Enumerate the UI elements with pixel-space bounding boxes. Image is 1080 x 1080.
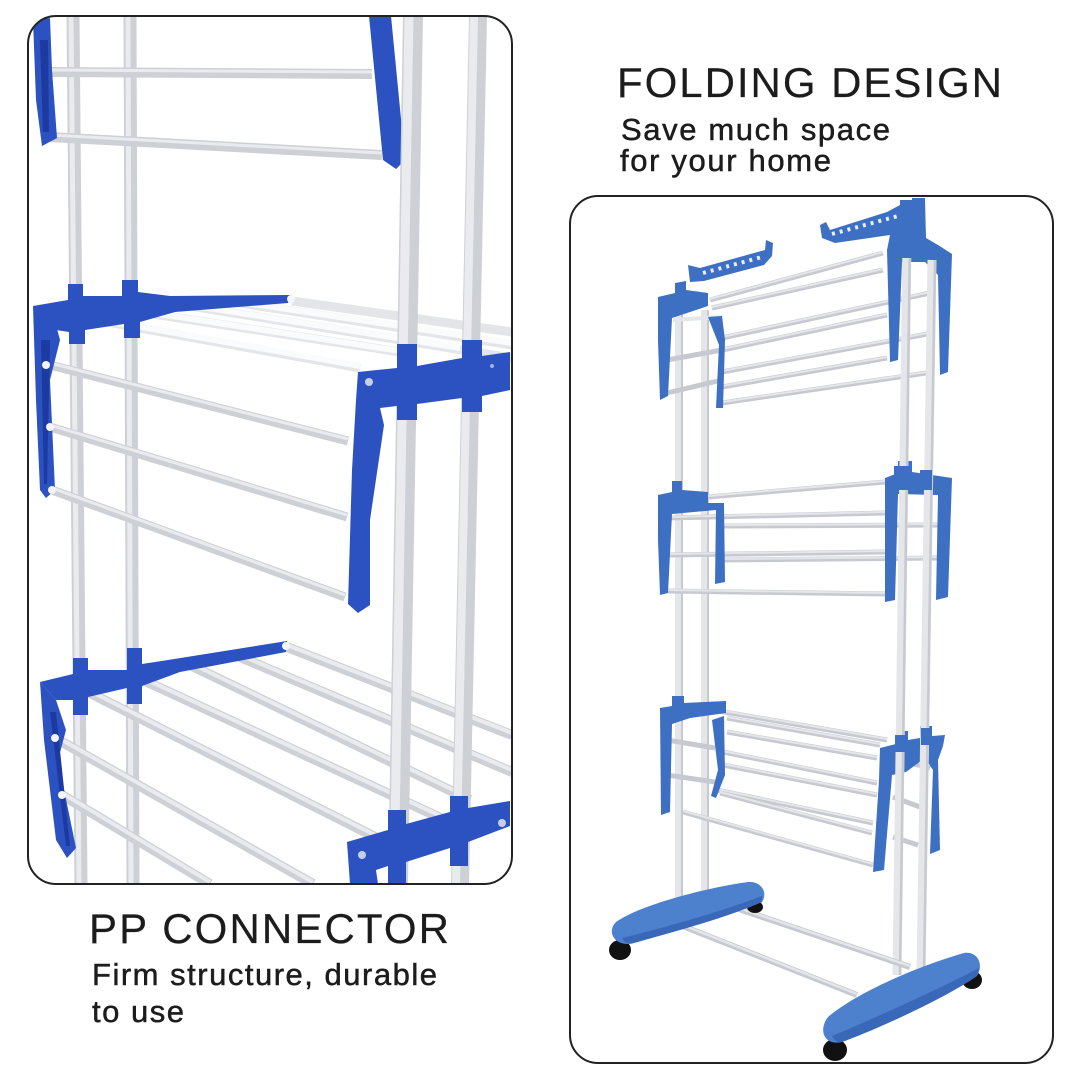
bottom shelf rails [667,709,930,865]
top shelf rails [667,252,933,403]
middle shelf blue brackets [658,461,952,602]
bottom tier front connector [347,796,510,884]
middle tier rails [50,301,512,597]
heading: PP connector: PP CONNECTOR [89,905,449,952]
text: save much space: for your home [620,143,831,178]
heading: folding design: FOLDING DESIGN [617,59,1002,106]
middle tier front connector [348,340,510,613]
top shelf blue brackets [658,198,952,408]
middle tier left bracket [33,280,295,498]
text: save much space: Save much space [621,112,890,147]
rack rear poles [679,310,708,925]
panel: full folding rack [570,196,1053,1063]
right comb [820,198,952,375]
left comb [688,240,773,282]
rear base foot [609,882,764,960]
bottom tier rails [55,645,512,884]
rail ends [42,295,295,494]
bottom tier left bracket [40,641,290,858]
front poles [892,198,938,975]
panel: PP connector close-up [28,16,512,884]
panel border [28,16,512,884]
front base foot [823,953,982,1061]
middle shelf rails [668,481,940,594]
base cross bars [675,906,910,995]
text: firm structure: Firm structure, durable [92,957,437,992]
text: firm structure: to use [92,994,184,1029]
bottom shelf blue brackets [660,696,945,872]
close-up vertical poles, rear [71,16,133,884]
front vertical poles [394,16,478,884]
top tier rails and brackets [33,16,405,169]
